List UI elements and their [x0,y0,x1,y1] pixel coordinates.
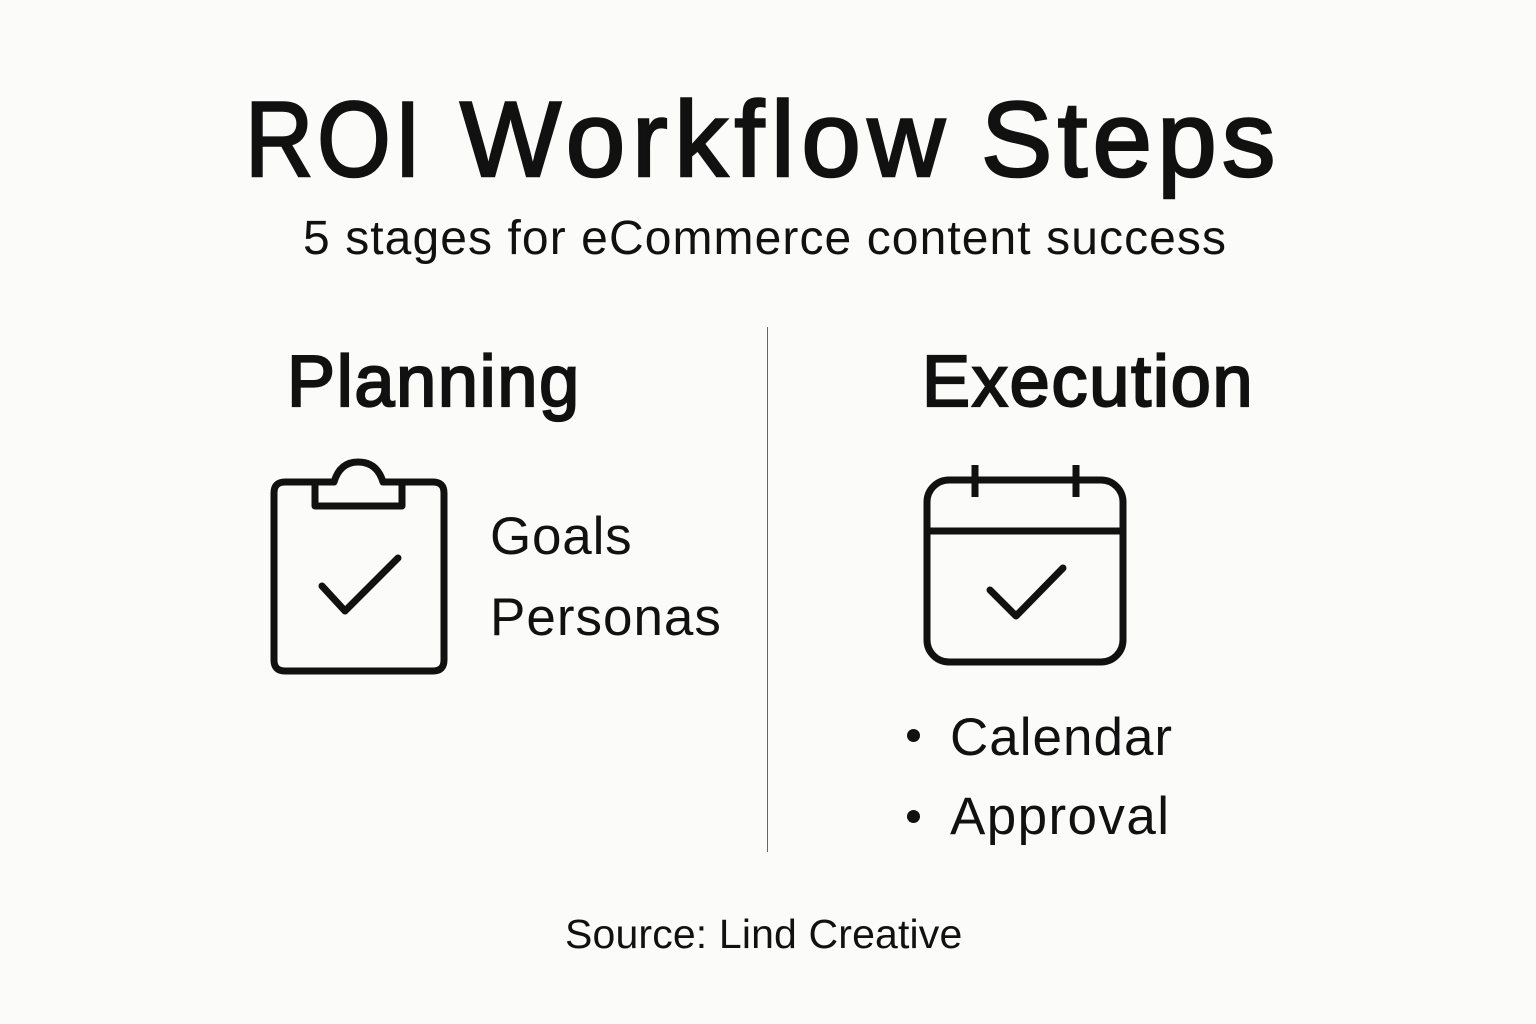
title [245,79,1281,200]
icon: clipboard with check [270,458,448,674]
list item: Calendar: Calendar [950,708,1173,767]
subtitle: 5 stages for eCommerce content success [303,212,1227,265]
divider [767,327,768,852]
label: Personas: Personas [490,588,722,647]
icon: calendar with check [924,465,1126,666]
panel: planning [270,342,722,674]
title: Steps [981,79,1281,199]
source note: Source: Lind Creative [565,911,962,957]
title: Workflow [460,79,952,199]
label: Goals: Goals [490,507,632,566]
list item: Approval: Approval [950,787,1170,846]
heading: Planning: Planning [287,342,581,422]
heading: Execution: Execution [922,342,1254,422]
panel: execution [907,342,1254,846]
title: ROI [245,79,425,199]
